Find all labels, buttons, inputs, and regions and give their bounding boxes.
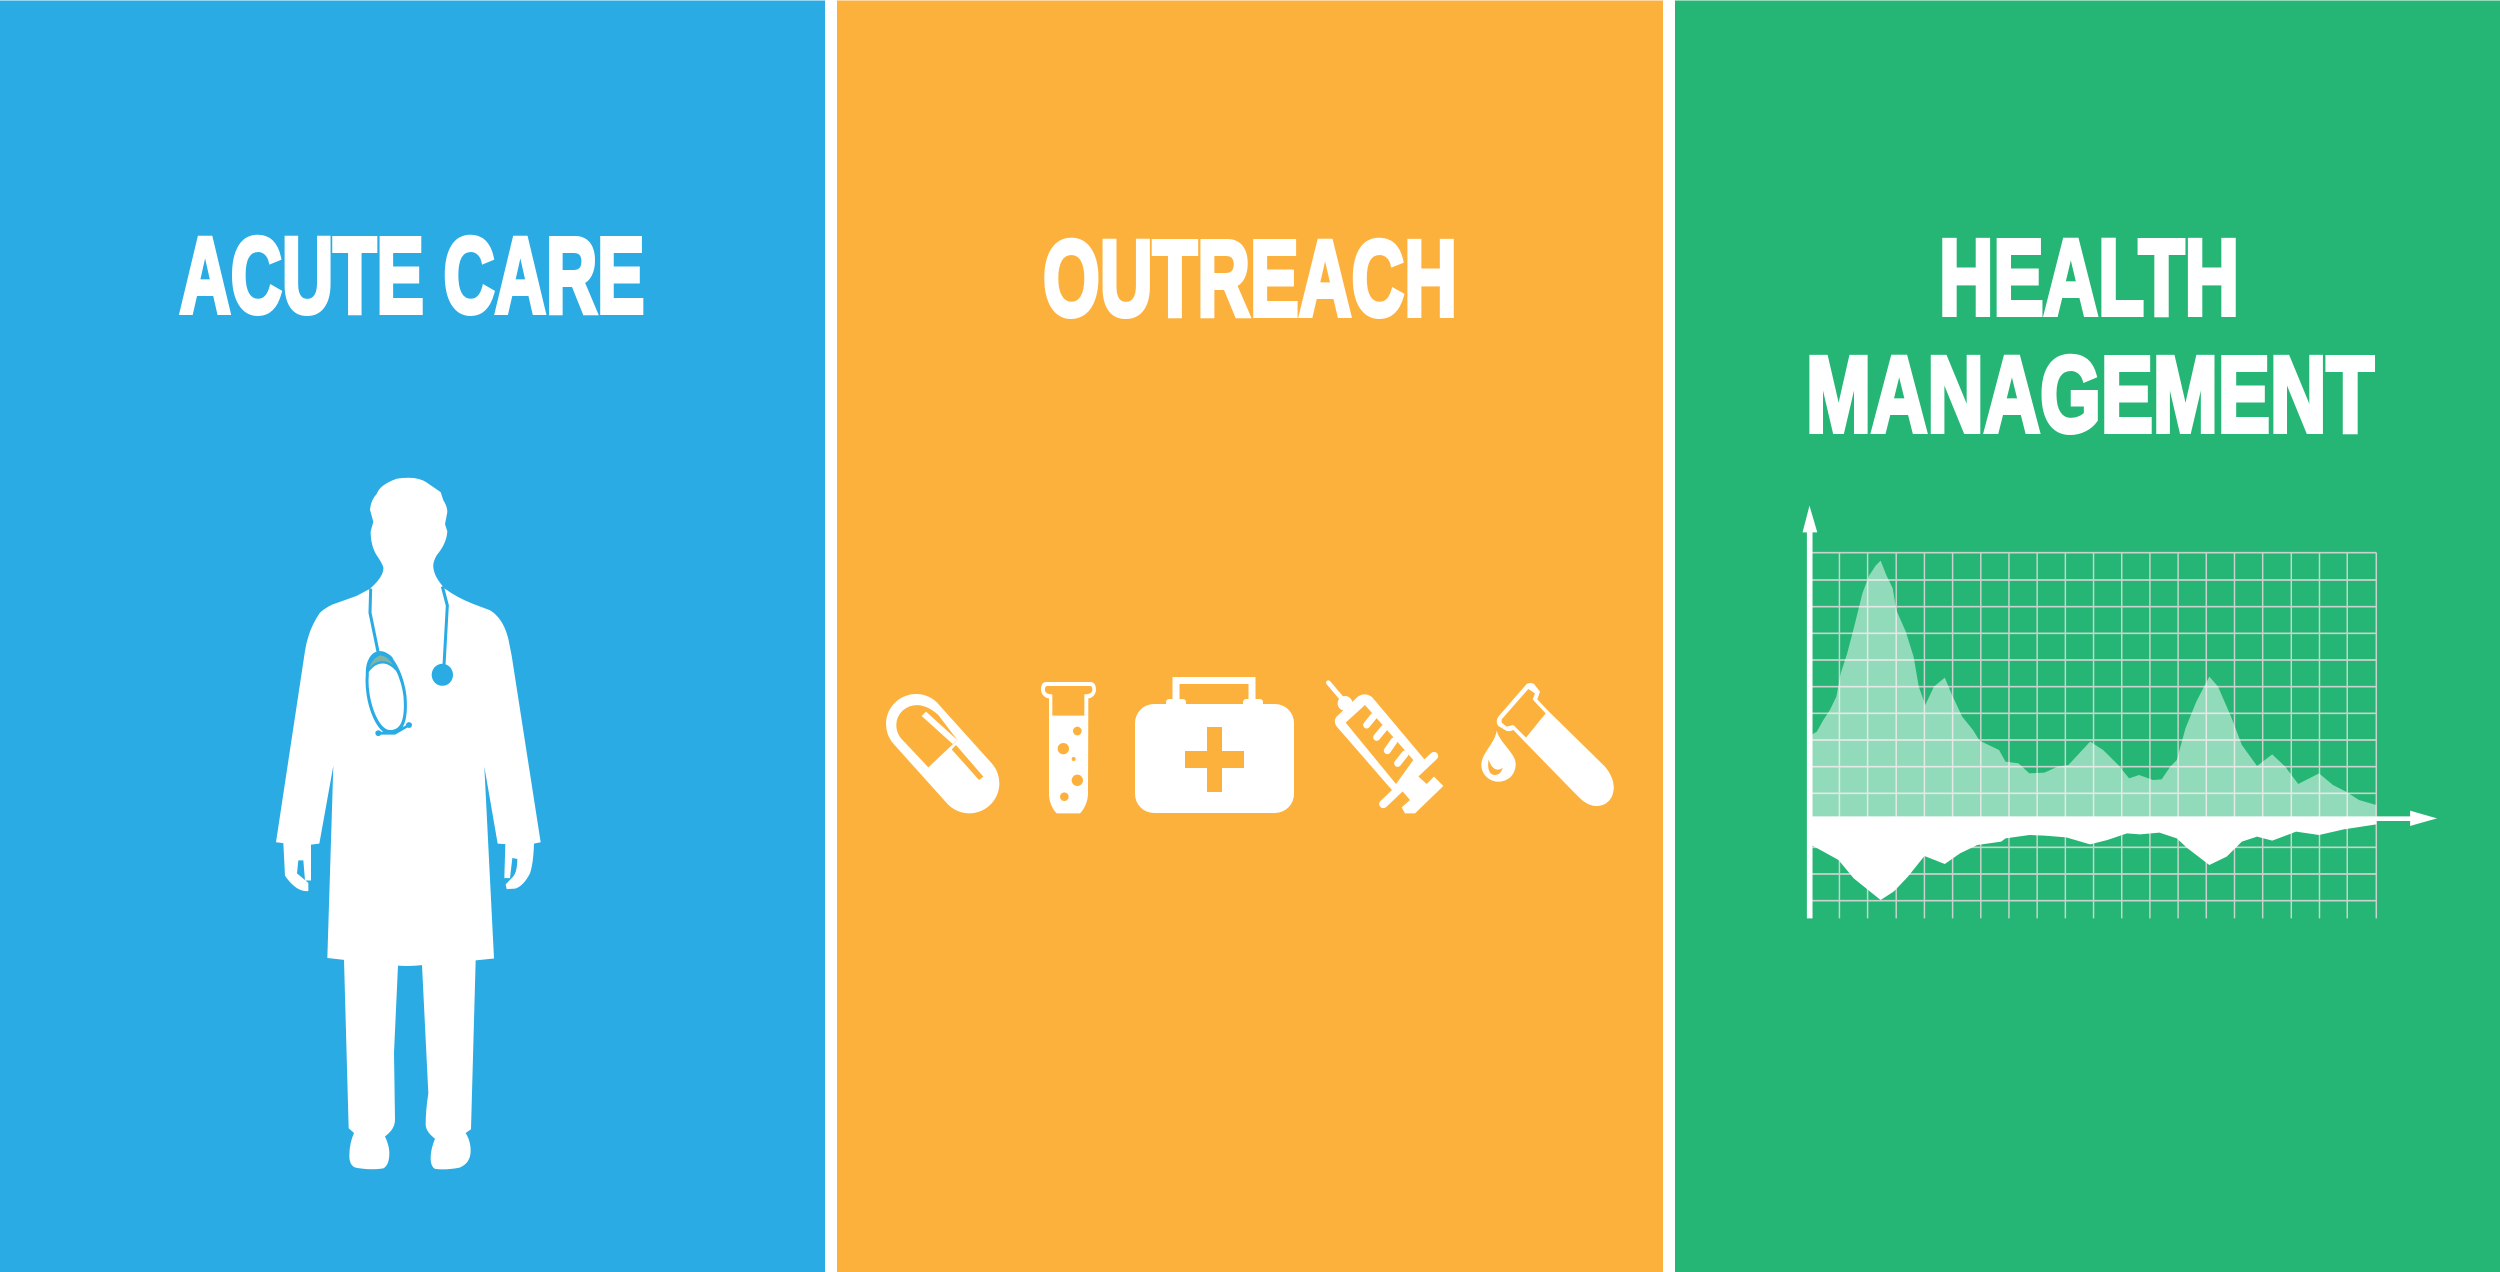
panel: acute care <box>0 0 825 1272</box>
y axis arrow <box>1803 506 1817 918</box>
stethoscope <box>367 586 453 736</box>
icon: blood test tube with drop <box>1481 683 1614 806</box>
chart: area chart on grid with axes <box>1803 506 2437 918</box>
icon: doctor silhouette with stethoscope <box>276 478 541 1169</box>
icon: pill capsule <box>896 705 983 783</box>
heading: acute care: ACUTE CARE <box>180 214 644 336</box>
icon: medical kit <box>1135 680 1294 813</box>
heading: health management: HEALTH <box>1939 216 2239 338</box>
x axis arrow <box>1811 811 2437 826</box>
icon: test tube with bubbles <box>1041 682 1096 813</box>
heading: health management <box>1806 216 2374 454</box>
heading: outreach: OUTREACH <box>1043 218 1457 338</box>
icon: syringe <box>1328 683 1443 813</box>
chart area: upper series <box>1811 561 2376 818</box>
chart area: white reflection <box>1811 820 2376 900</box>
panel: outreach <box>837 0 1663 1272</box>
panel: health management <box>1675 0 2500 1272</box>
